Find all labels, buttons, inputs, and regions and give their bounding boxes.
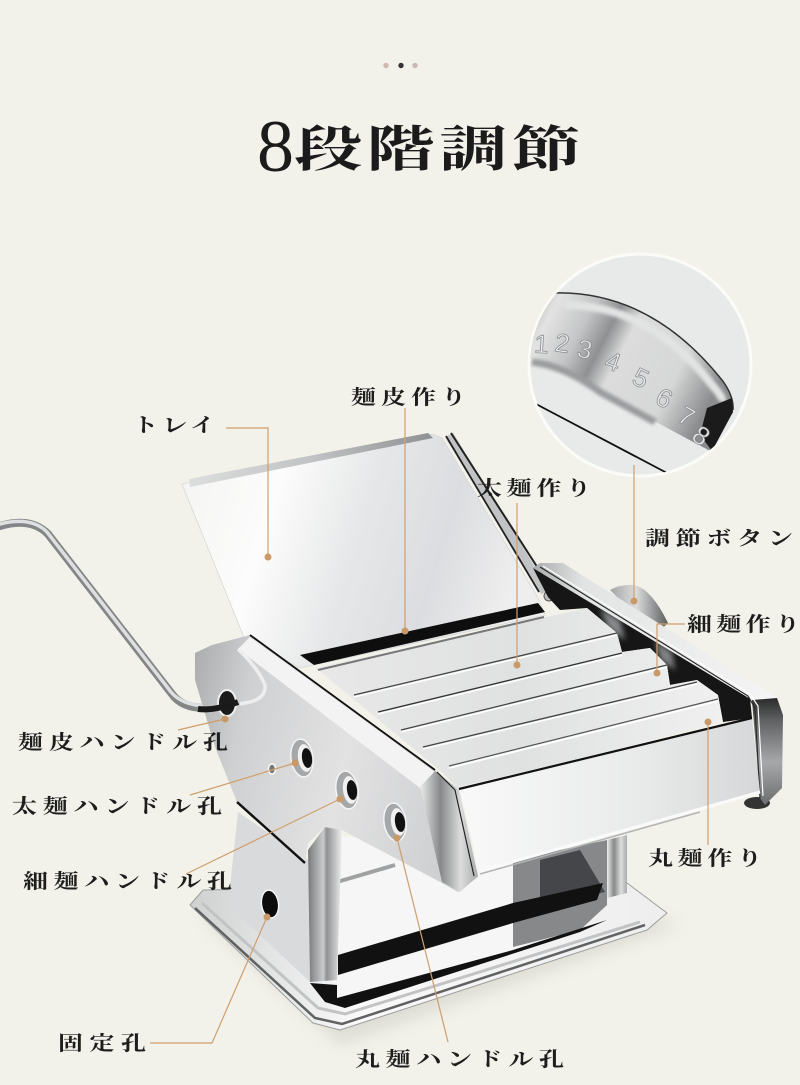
detail inset: numbered dial: 8	[687, 419, 716, 452]
leg	[228, 812, 342, 982]
callout: 固定孔	[58, 914, 270, 1054]
right side rim	[533, 563, 783, 809]
detail inset: numbered dial: 6	[651, 381, 678, 415]
rollers	[316, 608, 723, 790]
dark gap behind rollers	[533, 568, 752, 722]
callout: 太麺作り	[477, 477, 591, 668]
icon: fixing hole	[260, 889, 280, 919]
detail inset: numbered dial: 5	[628, 361, 654, 394]
callout: 調節ボタン: 調節ボタン	[645, 527, 793, 549]
callout: 調節ボタン	[630, 465, 793, 604]
callout: 麺皮ハンドル孔	[18, 716, 228, 753]
callout: 麺皮ハンドル孔: 麺皮ハンドル孔	[18, 731, 228, 753]
detail inset: numbered dial: 2	[553, 327, 572, 359]
adjustment knob	[610, 585, 668, 640]
black bands	[310, 883, 607, 1008]
callout: 麺皮作り	[351, 386, 466, 634]
callout: 丸麺作り: 丸麺作り	[648, 847, 762, 869]
side plate	[195, 635, 478, 892]
rear dark housing	[513, 840, 607, 947]
tray arm	[446, 433, 554, 601]
front box	[459, 718, 760, 874]
rear post	[607, 835, 627, 898]
title: 段階調節	[294, 122, 580, 177]
callout: トレイ: トレイ	[133, 414, 215, 436]
interior white panel	[337, 835, 520, 1000]
callout: 丸麺作り	[648, 718, 762, 869]
crank handle	[0, 521, 205, 708]
callout: 細麺作り	[654, 613, 800, 676]
handle hole	[218, 690, 236, 716]
callout: 細麺作り: 細麺作り	[687, 613, 800, 635]
detail inset: numbered dial: 4	[601, 345, 625, 378]
title: 8	[257, 106, 294, 188]
decorative three dots	[383, 63, 418, 68]
callout: 丸麺ハンドル孔: 丸麺ハンドル孔	[355, 1048, 564, 1070]
detail inset: numbered dial: 7	[673, 400, 700, 433]
black slot	[300, 603, 545, 665]
base shadow	[200, 900, 680, 1045]
handle holes row	[288, 738, 409, 842]
base plate	[190, 883, 667, 1030]
callout: 固定孔: 固定孔	[58, 1032, 146, 1054]
callout: 太麺作り: 太麺作り	[477, 477, 591, 499]
title	[257, 106, 580, 188]
tray	[182, 433, 545, 668]
callout: 細麺ハンドル孔	[23, 796, 344, 892]
callout: 麺皮作り: 麺皮作り	[351, 386, 466, 408]
callout: 細麺ハンドル孔: 細麺ハンドル孔	[23, 870, 232, 892]
callout: 丸麺ハンドル孔	[355, 834, 564, 1070]
pasta machine illustration	[0, 433, 783, 1045]
callout: 太麺ハンドル孔	[12, 760, 298, 817]
callout: 太麺ハンドル孔: 太麺ハンドル孔	[12, 795, 222, 817]
detail inset: numbered dial: 3	[575, 333, 595, 365]
detail inset: numbered dial: 1	[533, 329, 549, 359]
callout: トレイ	[133, 414, 272, 560]
detail inset: numbered dial	[528, 254, 751, 476]
